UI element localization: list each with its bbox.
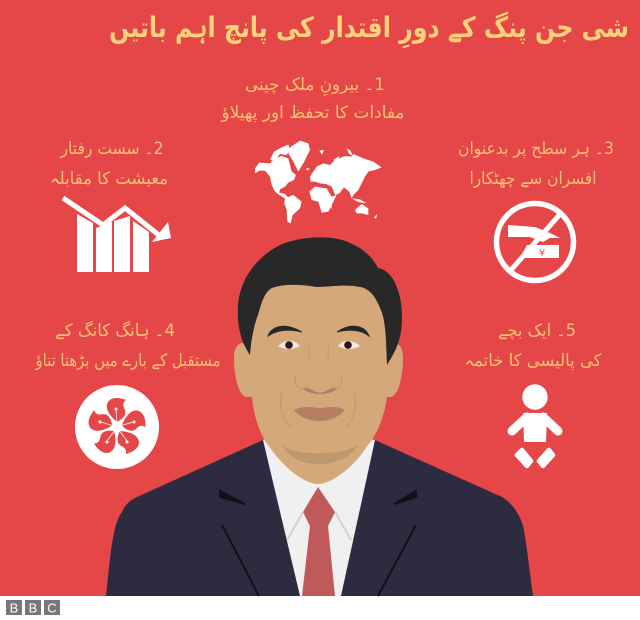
text block: item 5: [464, 321, 602, 371]
text block: item 2: معیشت کا مقابلہ: [50, 169, 168, 189]
text block: item 1: 1۔ بیرونِ ملک چینی: [245, 75, 385, 97]
icon: no bribery: [496, 204, 574, 280]
text block: item 3: افسران سے چھٹکارا: [470, 169, 596, 189]
BBC logo: C: [47, 600, 57, 616]
icon: falling chart: [63, 198, 171, 272]
text block: item 4: مستقبل کے بارے میں بڑھتا تناؤ: [35, 351, 220, 371]
text block: item 3: 3۔ ہر سطح پر بدعنوان: [458, 139, 614, 159]
text block: item 1: [221, 75, 404, 123]
text block: item 4: 4۔ ہانگ کانگ کے: [55, 320, 175, 341]
face: [250, 280, 387, 484]
text block: item 1: مفادات کا تحفظ اور پھیلاؤ: [221, 103, 404, 123]
collar fold lines: [287, 512, 351, 540]
shirt: [263, 430, 375, 596]
ears: [234, 343, 403, 397]
BBC logo: B: [29, 600, 37, 616]
text block: item 4: [35, 320, 220, 371]
nose and creases: [280, 345, 356, 428]
nostrils: [303, 388, 337, 394]
text block: item 2: 2۔ سست رفتار: [60, 139, 164, 159]
portrait: [106, 237, 533, 596]
icon: no bribery: ¥: [539, 248, 545, 259]
BBC logo: [6, 600, 60, 616]
icon: baby: [512, 384, 558, 466]
text block: item 5: کی پالیسی کا خاتمہ: [464, 351, 602, 371]
lapel marks: [220, 491, 416, 596]
lips: [294, 407, 345, 421]
eyes: [278, 341, 360, 349]
suit jacket: [106, 440, 533, 596]
hair: [238, 237, 402, 365]
eyebrows: [268, 326, 369, 336]
text block: item 3: [458, 139, 614, 189]
tie: [302, 487, 335, 596]
BBC logo: B: [10, 600, 18, 616]
text block: item 2: [50, 139, 168, 189]
text block: item 5: 5۔ ایک بچے: [498, 321, 576, 341]
icon: world map: [255, 141, 382, 223]
icon: Hong Kong flower: [75, 385, 159, 469]
neck shadow: [282, 445, 358, 464]
